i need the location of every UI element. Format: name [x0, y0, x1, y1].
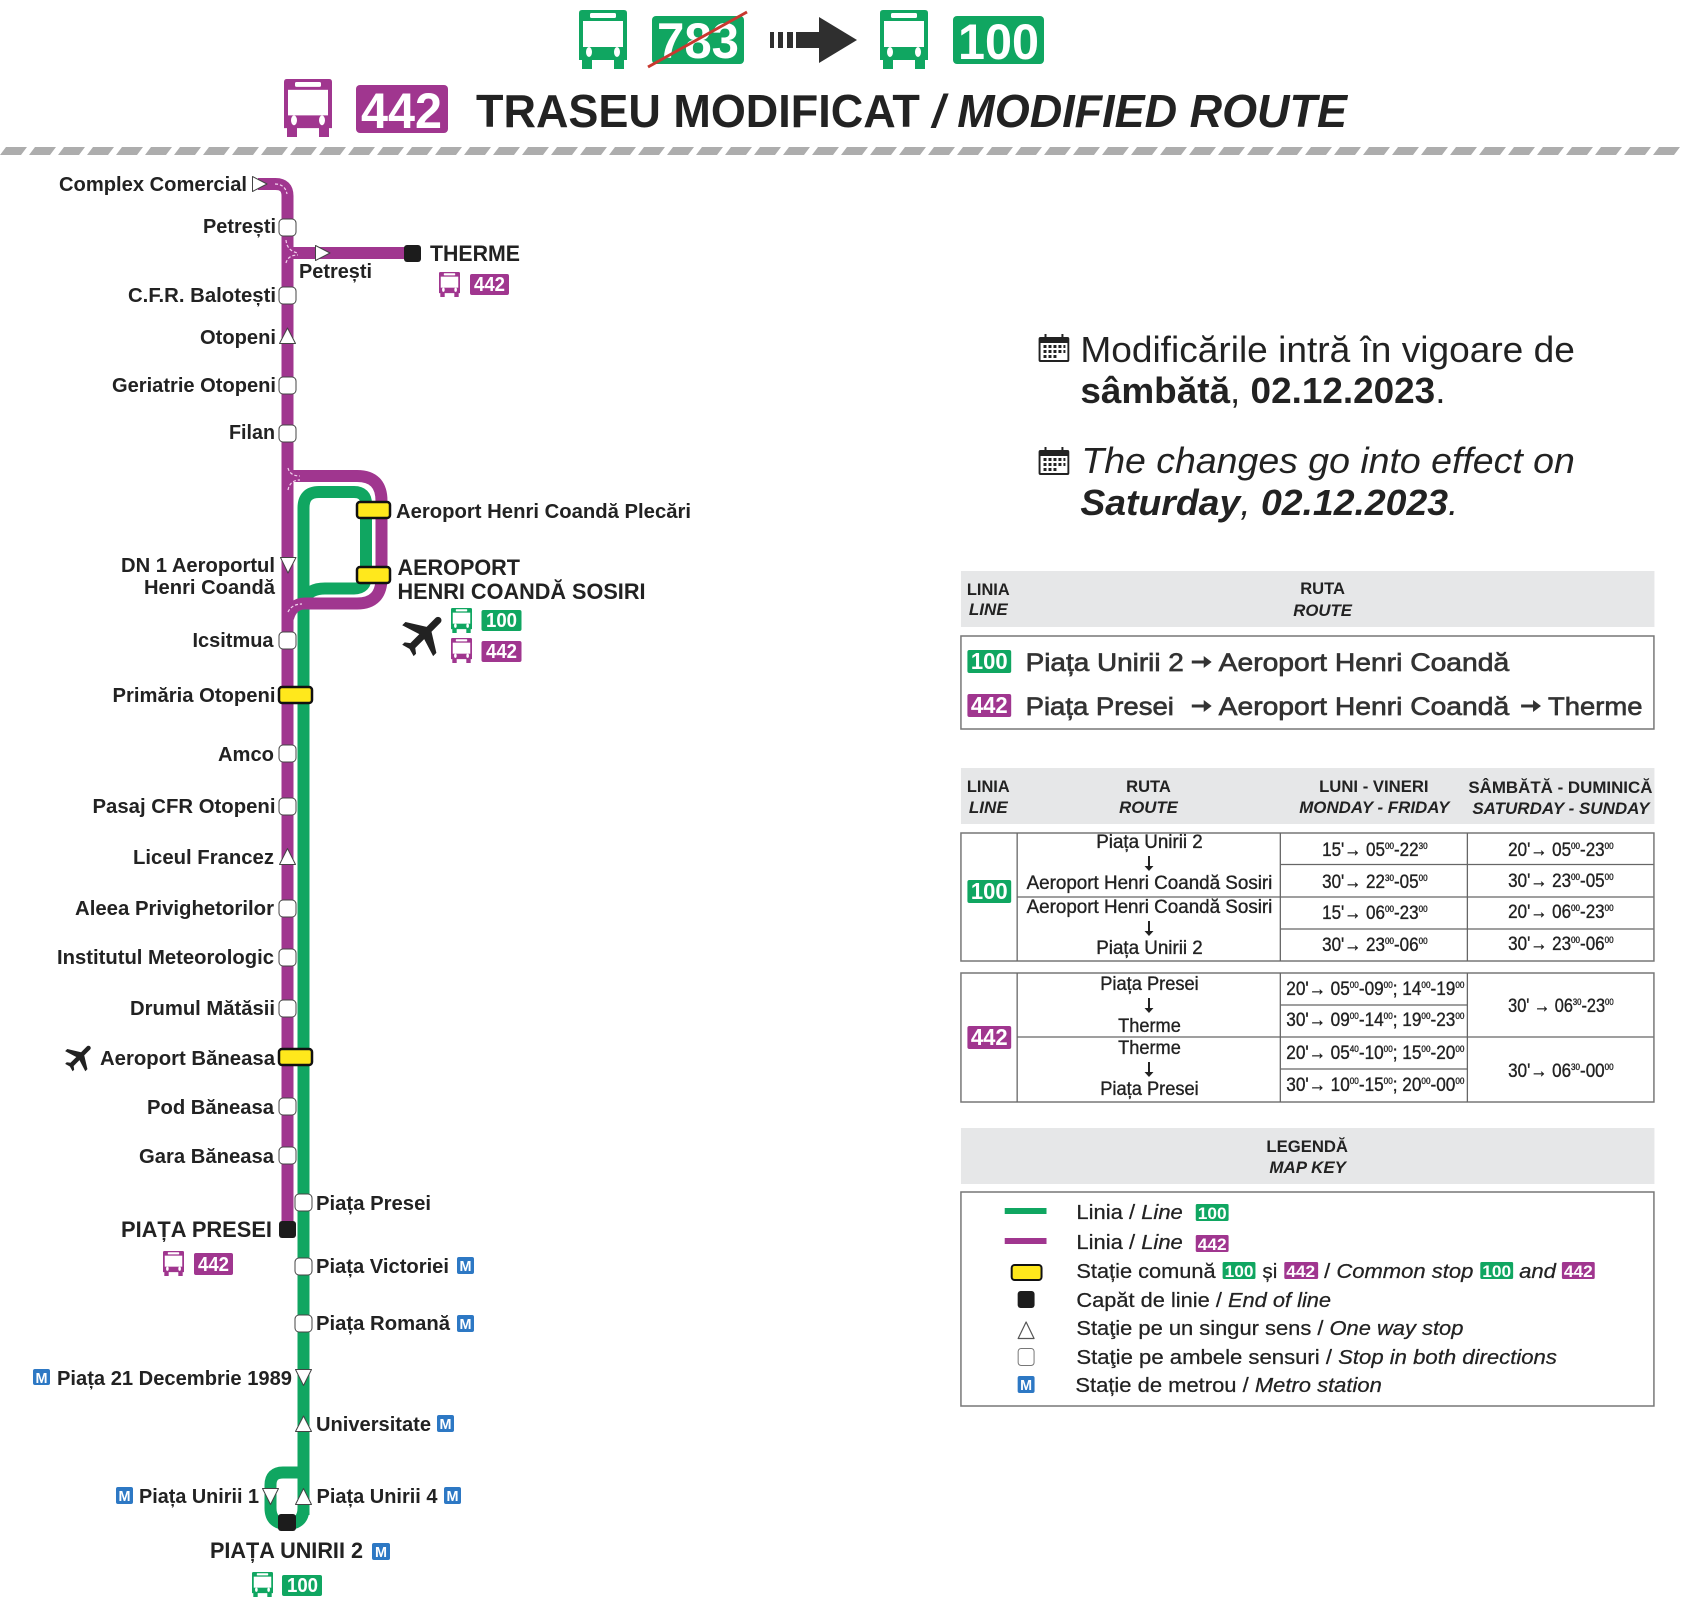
weekday headways: 00: [1455, 1076, 1464, 1086]
weekday headways: 00: [1385, 841, 1394, 851]
key: common stop: 100: [1482, 1262, 1511, 1281]
stop: Aeroport Băneasa: [59, 1036, 312, 1078]
weekday headways: 00: [1455, 980, 1464, 990]
notice: effective date (English): [1039, 441, 1575, 523]
stop: Piața Unirii 1: Piața Unirii 1: [139, 1486, 259, 1508]
badge: 100: 100: [971, 878, 1008, 904]
table header: line and route: LINIA: [967, 580, 1010, 599]
route text: Therme: [1118, 1038, 1181, 1059]
weekday headways: 15'→ 06: [1322, 903, 1392, 924]
badge: 442: 442: [361, 83, 442, 139]
weekday headways: 00: [1384, 1044, 1393, 1054]
stop: Petrești branch: [299, 246, 372, 283]
right column: notices, tables and legend: [961, 330, 1654, 1406]
weekday headways: 00: [1419, 904, 1428, 914]
stop: C.F.R. Balotești: C.F.R. Balotești: [128, 285, 276, 307]
weekend headways: -23: [1580, 840, 1605, 861]
terminus: Therme: [404, 241, 520, 297]
weekend headways: 30'→ 23: [1508, 934, 1578, 955]
weekday headways: 30'→ 23: [1322, 935, 1392, 956]
stop: Piața Victoriei: M: [460, 1258, 472, 1275]
terminus: Piața Unirii 2: M: [375, 1544, 387, 1561]
key: metro station: Stație de metrou / Metro station: [1075, 1375, 1382, 1397]
weekday headways: 00: [1384, 1076, 1393, 1086]
panel: legend: [961, 1192, 1654, 1406]
weekday headways: 00: [1350, 980, 1359, 990]
stop: Piața 21 Decembrie 1989: M: [36, 1370, 48, 1387]
arrow: replaced by: [770, 17, 857, 63]
weekday headways: [1322, 840, 1428, 956]
weekend headways: -23: [1581, 996, 1605, 1017]
key: line 442: [1005, 1232, 1229, 1254]
weekday headways: 30: [1385, 873, 1394, 883]
badge: 100: 100: [958, 14, 1039, 70]
weekday headways: -09: [1359, 979, 1384, 1000]
table header: schedule: LUNI - VINERI: [1319, 777, 1429, 796]
key: one way stop: Staţie pe un singur sens / One way stop: [1076, 1318, 1463, 1340]
weekend headways: [1508, 996, 1614, 1082]
stop: Liceul Francez: Liceul Francez: [133, 847, 274, 869]
table header: schedule: LINIA: [967, 777, 1010, 796]
weekday headways: 00: [1421, 980, 1430, 990]
terminus: Piața Unirii 2: PIAȚA UNIRII 2: [210, 1538, 363, 1563]
airport lines: 100 and 442: [451, 608, 522, 663]
badge: crossed-out 783: 783: [657, 13, 739, 69]
table header: schedule: [961, 768, 1654, 824]
stop: Piața Presei: Piața Presei: [316, 1193, 431, 1215]
terminus: Therme: THERME: [430, 241, 520, 266]
terminus: Piața Presei: [121, 1217, 296, 1276]
weekday headways: ; 19: [1393, 1010, 1421, 1031]
text block: Modificările intră în vigoare de: [1080, 330, 1575, 370]
weekend headways: 00: [1605, 872, 1614, 882]
weekday headways: 30'→ 22: [1322, 872, 1392, 893]
weekday headways: 00: [1455, 1011, 1464, 1021]
weekday headways: 00: [1384, 1011, 1393, 1021]
key: stop in both directions: Staţie pe ambele sensuri / Stop in both directions: [1076, 1347, 1557, 1369]
key: common stop: and: [1519, 1261, 1557, 1283]
icon: purple bus: [284, 79, 332, 137]
key: common stop: / Common stop: [1324, 1261, 1473, 1283]
stop: Piața Romană: M: [460, 1316, 472, 1333]
stop: Gara Băneasa: Gara Băneasa: [139, 1146, 275, 1168]
stop: Aeroport Henri Coandă Sosiri: HENRI COANDĂ SOSIRI: [398, 579, 646, 604]
key: line 100: 100: [1198, 1204, 1227, 1223]
table header: schedule: SÂMBĂTĂ - DUMINICĂ: [1468, 778, 1652, 797]
stop: Filan: Filan: [229, 422, 275, 444]
legend heading: MAP KEY: [1269, 1158, 1348, 1177]
key: line 100: Linia / Line: [1076, 1202, 1183, 1224]
route line 442: Therme: [1548, 693, 1642, 721]
stop: Filan: [229, 422, 296, 444]
weekday headways: 00: [1419, 936, 1428, 946]
table header: schedule: ROUTE: [1119, 798, 1179, 817]
weekday headways: 00: [1385, 936, 1394, 946]
weekday headways: 00: [1350, 1076, 1359, 1086]
table header: line and route: LINE: [969, 600, 1008, 619]
weekend headways: -00: [1580, 1061, 1605, 1082]
stop: Amco: Amco: [218, 744, 274, 766]
terminus: Piața Presei: PIAȚA PRESEI: [121, 1217, 272, 1242]
stop: Complex Comercial: Complex Comercial: [59, 174, 247, 196]
stop: Piața 21 Decembrie 1989: Piața 21 Decembrie 1989: [57, 1368, 292, 1390]
weekend headways: 00: [1605, 935, 1614, 945]
icon: green bus: [579, 10, 627, 69]
weekday headways: 30'→ 10: [1286, 1075, 1356, 1096]
line 442 route: [258, 184, 405, 1230]
stop: DN 1 Aeroportul Henri Coandă: DN 1 Aeroportul: [121, 555, 275, 577]
stop: Aleea Privighetorilor: Aleea Privighetorilor: [75, 898, 274, 920]
terminus: Piața Unirii 2: 100: [287, 1575, 318, 1597]
header: line 783 replaced by line 100: [579, 10, 1044, 70]
panel: line routes: [961, 636, 1654, 729]
stop: Aeroport Henri Coandă Sosiri: AEROPORT: [398, 555, 521, 580]
weekend headways: 20'→ 06: [1508, 902, 1578, 923]
stop: Universitate: M: [440, 1416, 452, 1433]
route line 100: Piața Unirii 2: [1026, 649, 1184, 677]
legend heading: LEGENDĂ: [1266, 1137, 1348, 1156]
weekday headways: -10: [1359, 1043, 1384, 1064]
stop: Petrești: Petrești: [203, 216, 276, 238]
weekday headways: 00: [1385, 904, 1394, 914]
table header: schedule: SATURDAY - SUNDAY: [1472, 799, 1651, 818]
weekend headways: 00: [1571, 903, 1580, 913]
table header: line and route: ROUTE: [1293, 601, 1353, 620]
stop: Drumul Mătăsii: Drumul Mătăsii: [130, 998, 275, 1020]
table header: schedule: RUTA: [1126, 777, 1171, 796]
icon: green bus: [880, 10, 928, 69]
table header: schedule: LINE: [969, 798, 1008, 817]
stop: Piața Romană: Piața Romană: [316, 1313, 451, 1335]
text block: [1080, 441, 1575, 523]
stop: Primăria Otopeni: Primăria Otopeni: [112, 685, 276, 707]
route text: Piața Presei: [1100, 1079, 1199, 1100]
key: common stop: 100: [1225, 1262, 1253, 1281]
route line 442: Piața Presei: [1026, 693, 1174, 721]
weekday headways: 00: [1455, 1044, 1464, 1054]
route line 100: [967, 648, 1509, 677]
weekend headways: 00: [1605, 903, 1614, 913]
stop: Pod Băneasa: Pod Băneasa: [147, 1097, 275, 1119]
route map: [33, 174, 691, 1597]
stop: Icsitmua: Icsitmua: [192, 630, 274, 652]
weekday headways: -23: [1394, 903, 1419, 924]
route text: [1027, 832, 1272, 959]
table header: line and route: RUTA: [1300, 579, 1345, 598]
stop: Institutul Meteorologic: Institutul Meteorologic: [57, 947, 274, 969]
weekend headways: 30: [1571, 1062, 1580, 1072]
route text: [1100, 974, 1199, 1100]
weekend headways: 00: [1571, 872, 1580, 882]
stop: DN 1 Aeroportul Henri Coandă: Henri Coandă: [144, 577, 276, 599]
notice: effective date (Romanian): [1039, 330, 1575, 411]
weekday headways: -20: [1430, 1043, 1455, 1064]
weekday headways: 00: [1421, 1076, 1430, 1086]
route text: Piața Unirii 2: [1096, 832, 1203, 853]
weekday headways: -14: [1359, 1010, 1384, 1031]
stop: Piața Unirii 4: Piața Unirii 4: [316, 1486, 438, 1508]
weekday headways: -23: [1430, 1010, 1455, 1031]
weekend headways: 00: [1605, 1062, 1614, 1072]
weekday headways: 00: [1421, 1011, 1430, 1021]
weekend headways: 30'→ 23: [1508, 871, 1578, 892]
stop: Aeroport Henri Coandă Sosiri: [357, 555, 646, 604]
stop: Geriatrie Otopeni: Geriatrie Otopeni: [112, 375, 276, 397]
weekday headways: 40: [1350, 1044, 1359, 1054]
weekend headways: 00: [1605, 997, 1614, 1007]
weekday headways: -19: [1430, 979, 1455, 1000]
airport lines: 100 and 442: 100: [486, 610, 517, 632]
route line 442: [967, 692, 1642, 721]
stop: Otopeni: Otopeni: [200, 327, 276, 349]
key: common stop: [1012, 1261, 1595, 1283]
weekday headways: 00: [1384, 980, 1393, 990]
terminus: Piața Unirii 2: [210, 1514, 390, 1597]
route text: Aeroport Henri Coandă Sosiri: [1027, 873, 1272, 894]
weekend headways: 30' → 06: [1508, 996, 1583, 1017]
key: common stop: și: [1262, 1261, 1277, 1283]
weekend headways: 30: [1573, 997, 1581, 1007]
icon: calendar: [1039, 447, 1069, 475]
key: line 100: [1005, 1202, 1229, 1224]
key: common stop: 442: [1564, 1262, 1593, 1281]
key: line 442: Linia / Line: [1076, 1232, 1183, 1254]
key: metro station: M: [1020, 1377, 1032, 1394]
airport lines: 100 and 442: 442: [486, 641, 517, 663]
terminus: Therme: 442: [474, 274, 505, 296]
schedule table: line 442: [961, 973, 1654, 1102]
weekday headways: 00: [1419, 873, 1428, 883]
stop: Aeroport Henri Coandă Plecări: Aeroport Henri Coandă Plecări: [396, 501, 691, 523]
weekday headways: ; 14: [1393, 979, 1421, 1000]
text block: Saturday, 02.12.2023.: [1080, 483, 1458, 523]
stop: Piața Unirii 4: M: [446, 1488, 458, 1505]
table header: schedule: MONDAY - FRIDAY: [1299, 798, 1451, 817]
weekday headways: 30'→ 09: [1286, 1010, 1356, 1031]
stop: Aeroport Băneasa: Aeroport Băneasa: [100, 1048, 276, 1070]
weekday headways: -06: [1394, 935, 1419, 956]
table header: line and route: [961, 571, 1654, 627]
line 100 route: [270, 492, 366, 1524]
weekend headways: -23: [1580, 902, 1605, 923]
weekday headways: 00: [1350, 1011, 1359, 1021]
text block: [1080, 330, 1575, 411]
weekday headways: 20'→ 05: [1286, 1043, 1356, 1064]
weekday headways: 00: [1421, 1044, 1430, 1054]
route line 100: 100: [971, 648, 1008, 674]
weekday headways: -05: [1394, 872, 1419, 893]
route text: Aeroport Henri Coandă Sosiri: [1027, 897, 1272, 918]
weekday headways: -15: [1359, 1075, 1384, 1096]
weekend headways: -05: [1580, 871, 1605, 892]
route line 442: Aeroport Henri Coandă: [1219, 693, 1509, 721]
weekday headways: -00: [1430, 1075, 1455, 1096]
key: line 442: 442: [1198, 1235, 1227, 1254]
weekday headways: -22: [1394, 840, 1419, 861]
weekend headways: -06: [1580, 934, 1605, 955]
stop: Petrești branch: Petrești: [299, 261, 372, 283]
stop: DN 1 Aeroportul Henri Coandă: [121, 555, 296, 599]
route text: Piața Unirii 2: [1096, 938, 1203, 959]
stop: Piața Victoriei: Piața Victoriei: [316, 1256, 449, 1278]
text block: sâmbătă, 02.12.2023.: [1080, 371, 1445, 411]
weekend headways: 30'→ 06: [1508, 1061, 1578, 1082]
route text: Piața Presei: [1100, 974, 1199, 995]
stop: Piața Unirii 1: M: [118, 1488, 130, 1505]
heading text: TRASEU MODIFICAT / MODIFIED ROUTE: [476, 85, 1348, 137]
title: [284, 79, 1348, 139]
weekend headways: 00: [1571, 935, 1580, 945]
icon: airplane: [392, 602, 456, 666]
legend heading: [961, 1128, 1654, 1184]
route line 442: 442: [971, 692, 1008, 718]
weekday headways: ; 20: [1393, 1075, 1421, 1096]
direction marks: [275, 184, 302, 612]
terminus: Piața Presei: 442: [198, 1254, 229, 1276]
weekday headways: 15'→ 05: [1322, 840, 1392, 861]
icon: calendar: [1039, 334, 1069, 362]
schedule table: line 100: [961, 832, 1654, 961]
key: common stop: Stație comună: [1076, 1261, 1217, 1283]
weekend headways: 00: [1605, 841, 1614, 851]
weekday headways: ; 15: [1393, 1043, 1421, 1064]
stop: Pasaj CFR Otopeni: Pasaj CFR Otopeni: [92, 796, 276, 818]
weekend headways: 20'→ 05: [1508, 840, 1578, 861]
route text: Therme: [1118, 1016, 1181, 1037]
weekend headways: 00: [1571, 841, 1580, 851]
route line 100: Aeroport Henri Coandă: [1219, 649, 1509, 677]
weekday headways: [1286, 979, 1464, 1096]
weekday headways: 20'→ 05: [1286, 979, 1356, 1000]
weekend headways: [1508, 840, 1614, 955]
stop: Universitate: Universitate: [316, 1414, 431, 1436]
key: end of line: Capăt de linie / End of line: [1076, 1290, 1331, 1312]
text block: The changes go into effect on: [1081, 441, 1575, 481]
badge: 442: 442: [971, 1024, 1008, 1050]
key: common stop: 442: [1286, 1262, 1315, 1281]
weekday headways: 30: [1419, 841, 1428, 851]
